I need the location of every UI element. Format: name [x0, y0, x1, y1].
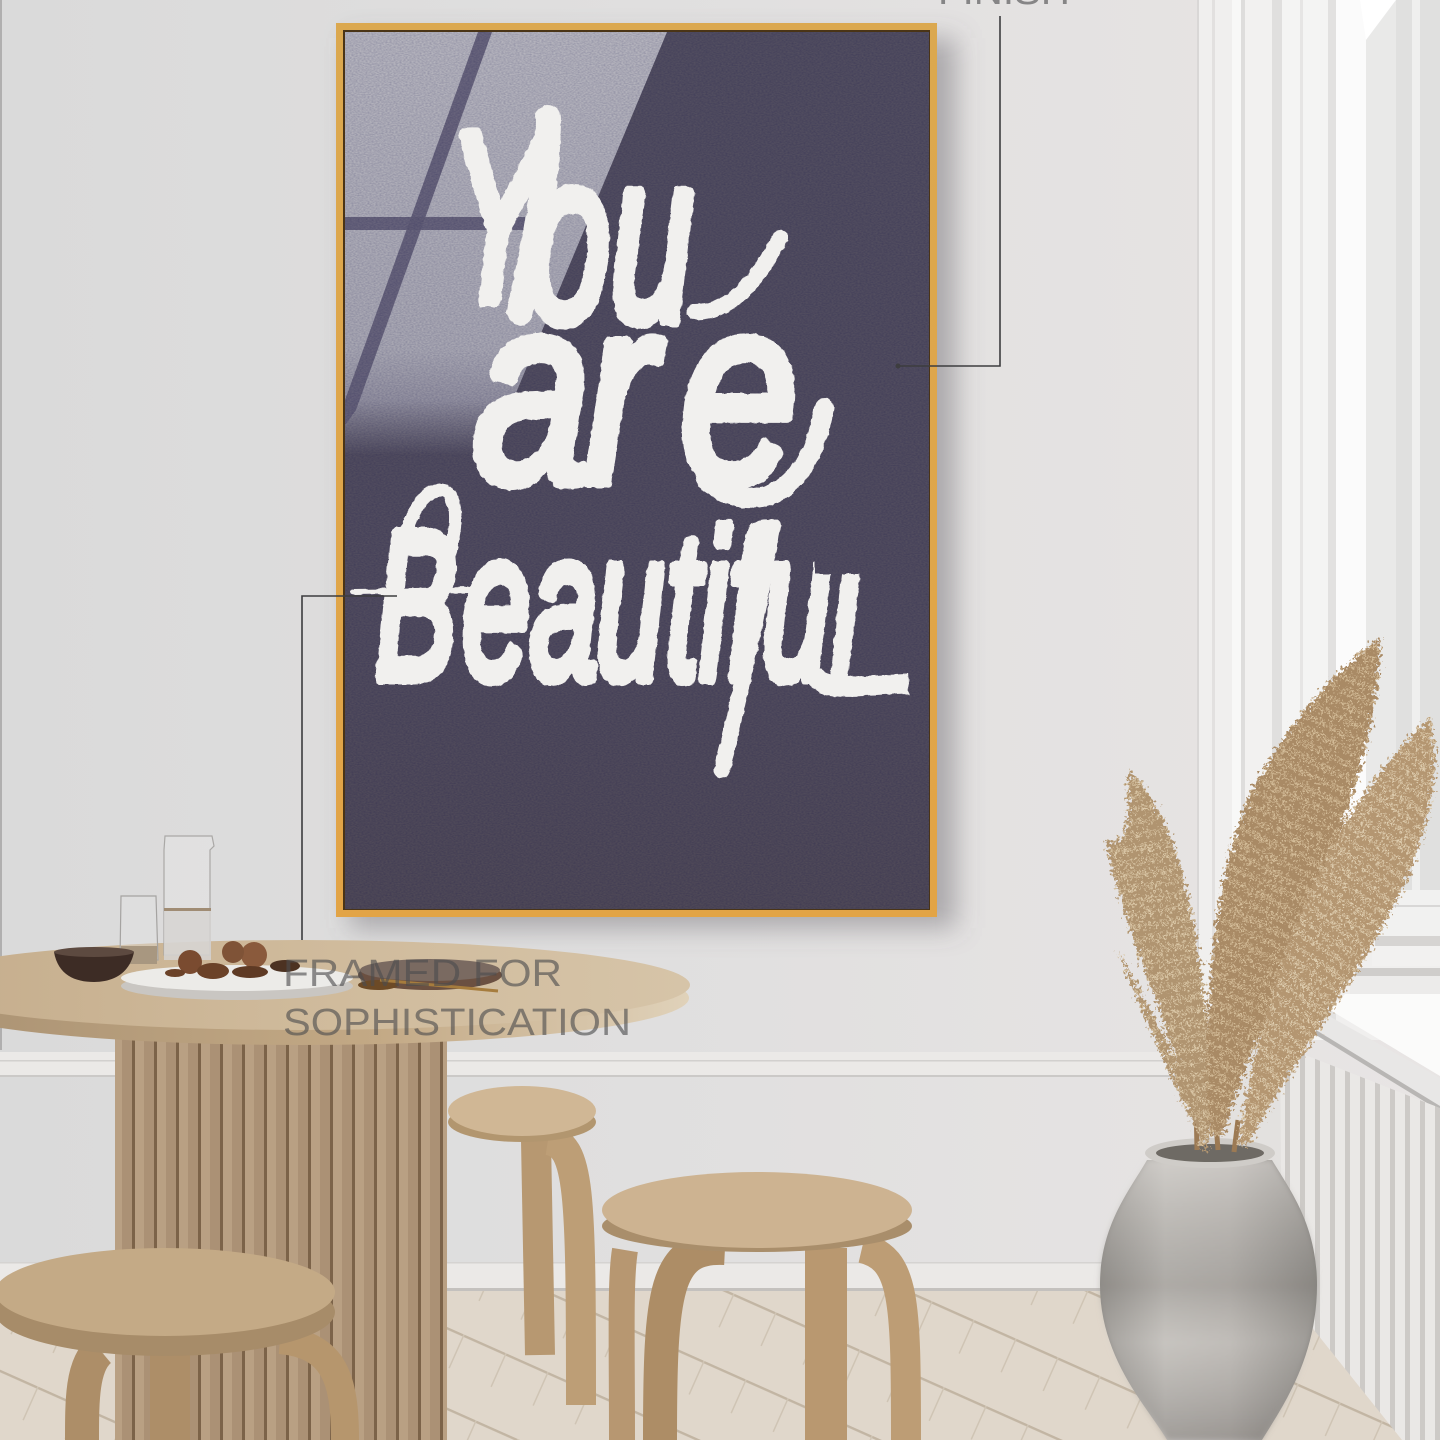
window sill	[1316, 994, 1440, 1111]
drinking glass	[120, 896, 158, 964]
gold floater frame	[336, 23, 937, 917]
baseboard	[0, 1262, 1282, 1291]
leader line: frame	[302, 596, 397, 945]
back stool	[448, 1086, 596, 1405]
artwork drop shadow	[350, 38, 956, 928]
leader dot: finish	[896, 364, 900, 368]
caption: framed for sophistication	[283, 953, 631, 1044]
plume: left	[1106, 768, 1210, 1150]
framed artwork	[336, 23, 937, 917]
word: Beautiful: Beautiful	[375, 490, 862, 723]
brown seed pods	[165, 941, 300, 979]
caption: framed for sophistication: SOPHISTICATION	[283, 1002, 631, 1044]
window frame and trim	[1197, 0, 1440, 1040]
inner frame shadow	[343, 30, 930, 910]
word: You: You	[448, 84, 693, 372]
plume: thin left sprays	[1106, 838, 1200, 1126]
round table top	[0, 940, 690, 1045]
table pedestal	[115, 1036, 447, 1440]
dark plate and spoon	[358, 959, 502, 991]
pampas grass	[1106, 638, 1435, 1152]
word: are: are	[473, 242, 798, 538]
stems	[1196, 1100, 1238, 1152]
floor	[0, 1290, 1402, 1440]
chair rail moulding	[0, 1052, 1180, 1077]
canvas	[345, 32, 929, 909]
left stool	[0, 1248, 345, 1440]
glass pitcher	[164, 836, 214, 960]
lower wall panel	[1190, 1040, 1300, 1300]
plume: middle	[1207, 638, 1380, 1135]
clay vase	[1100, 1138, 1317, 1440]
radiator	[1280, 1045, 1440, 1440]
plume: right	[1238, 718, 1435, 1145]
leader line: finish	[897, 16, 1000, 366]
caption: framed for sophistication: FRAMED FOR	[283, 953, 562, 995]
marble plate	[121, 965, 353, 1000]
window reflection on the glass	[345, 32, 667, 455]
canvas linen texture	[345, 32, 929, 909]
dark wooden bowl	[54, 947, 134, 982]
stack of books on the sill	[1350, 936, 1440, 996]
hand lettering	[354, 84, 908, 770]
front stool	[602, 1172, 912, 1440]
